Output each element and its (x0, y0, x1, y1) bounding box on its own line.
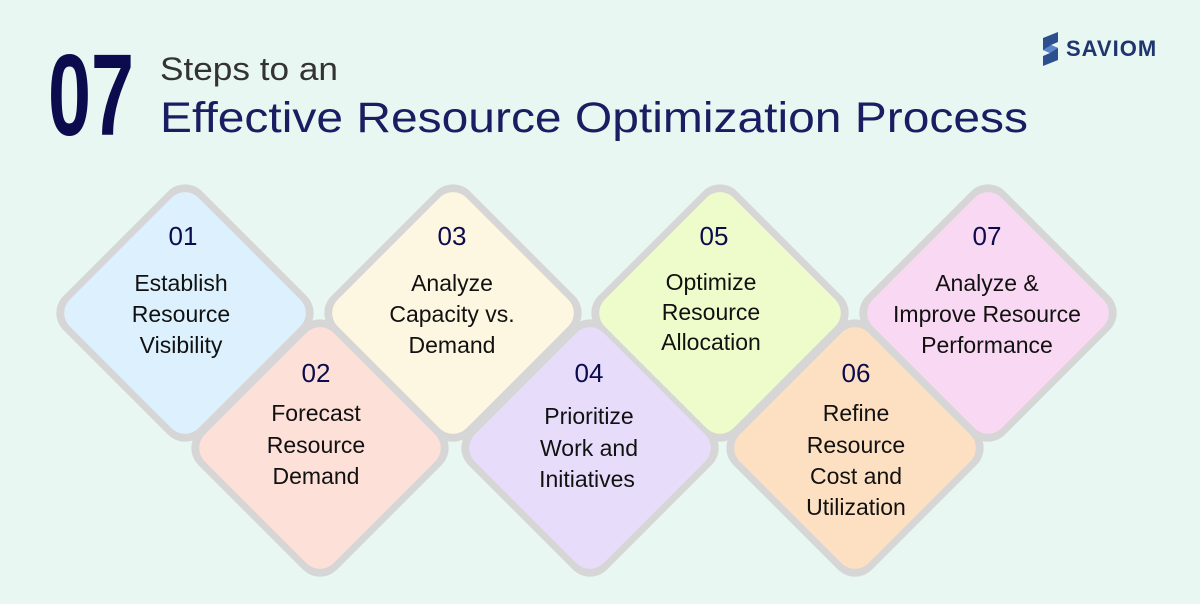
title number: 07 (48, 30, 134, 160)
step 02: Forecast (271, 400, 361, 426)
step 04: Work and (540, 435, 638, 461)
step 02 (191, 319, 449, 577)
step 03: Demand (409, 332, 495, 358)
step 03: 03 (438, 221, 466, 251)
step 06: Utilization (806, 494, 906, 520)
step 03: Capacity vs. (389, 301, 515, 327)
step 06 (726, 319, 984, 577)
step 01: Resource (132, 301, 230, 327)
step 01 (56, 184, 314, 442)
step 01: 01 (169, 221, 197, 251)
step 01: Establish (134, 270, 228, 296)
step 07 (859, 184, 1117, 442)
step 01: Visibility (140, 332, 223, 358)
step 05: Allocation (661, 329, 761, 355)
logo: saviom (1043, 32, 1157, 66)
diamond borders (46, 174, 1127, 587)
step 07: Analyze & (935, 270, 1039, 296)
step 02: Resource (267, 432, 365, 458)
step 05: Resource (662, 299, 760, 325)
logo: saviom: SAVIOM (1066, 36, 1157, 61)
step 04 (461, 319, 719, 577)
step 04: Initiatives (539, 466, 635, 492)
step 03: Analyze (411, 270, 493, 296)
title: Effective Resource Optimization Process (160, 94, 1028, 142)
step 05: 05 (700, 221, 728, 251)
step 06: 06 (842, 358, 870, 388)
step 02: Demand (273, 463, 359, 489)
step 05: Optimize (666, 269, 756, 295)
title (160, 51, 1028, 142)
title: Steps to an (160, 51, 338, 87)
step 04: 04 (575, 358, 603, 388)
step 03 (324, 184, 582, 442)
step 04: Prioritize (544, 403, 634, 429)
step 05 (591, 184, 849, 442)
step 06: Cost and (810, 463, 902, 489)
step 07: 07 (973, 221, 1001, 251)
step 06: Refine (823, 400, 889, 426)
step 07: Improve Resource (893, 301, 1081, 327)
step 02: 02 (302, 358, 330, 388)
step 06: Resource (807, 432, 905, 458)
step 07: Performance (921, 332, 1053, 358)
